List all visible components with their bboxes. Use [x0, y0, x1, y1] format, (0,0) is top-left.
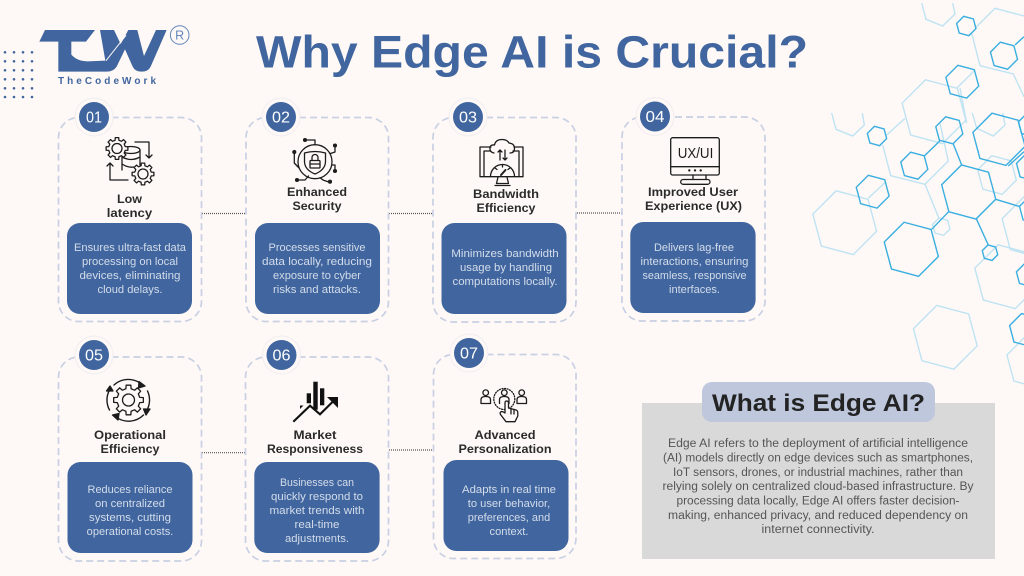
decorative hexagon network [813, 3, 1024, 388]
card 03: Bandwidth Efficiency: Minimizes bandwidth [451, 248, 559, 260]
icon: bars and rising arrow [293, 382, 338, 422]
card 07: Advanced Personalization: Advanced [474, 428, 536, 442]
panel: What is Edge AI [642, 382, 995, 559]
card 05: Operational Efficiency: systems, cutting [89, 512, 171, 524]
card 04: Improved User Experience: Improved User [648, 185, 738, 199]
card 05: Operational Efficiency [58, 336, 202, 561]
card 03: Bandwidth Efficiency: usage by handling [460, 262, 552, 274]
icon: UX/UI monitor: UX/UI [678, 145, 713, 162]
description text: making, enhanced privacy, and reduced dependency on [668, 510, 968, 522]
card 01: Low latency: Ensures ultra-fast data [74, 242, 187, 254]
card 06: Market Responsiveness: Responsiveness [267, 442, 363, 456]
connectors between cards [202, 213, 622, 453]
card 07: Advanced Personalization: context. [490, 526, 528, 538]
card 06: Market Responsiveness: adjustments. [285, 533, 349, 545]
card 07: Advanced Personalization [434, 334, 576, 558]
card 02: Enhanced Security: data locally, reducing [262, 256, 372, 268]
icon: cloud gauge monitor [480, 140, 523, 186]
card 07: Advanced Personalization: preferences, and [468, 512, 550, 524]
logo: TheCodeWork: TheCodeWork [58, 76, 156, 87]
card 05: Operational Efficiency: 05 [85, 348, 103, 365]
dot grid decoration [4, 51, 33, 98]
card 01: Low latency: Low [117, 192, 143, 206]
title: Why Edge AI is Crucial? [256, 26, 808, 78]
card 05: Operational Efficiency: Operational [94, 428, 166, 442]
card 06: Market Responsiveness: market trends with [270, 505, 364, 517]
card 07: Advanced Personalization: 07 [460, 346, 478, 363]
card 06: Market Responsiveness [246, 336, 388, 561]
card 01: Low latency [58, 98, 202, 322]
card 04: Improved User Experience: seamless, responsive [642, 270, 746, 282]
card 04: Improved User Experience: 04 [646, 109, 665, 126]
card 01: Low latency: devices, eliminating [80, 270, 180, 282]
card 07: Advanced Personalization: to user behavior, [468, 498, 550, 510]
card 06: Market Responsiveness: quickly respond to [271, 491, 363, 503]
card 05: Operational Efficiency: Reduces reliance [88, 484, 172, 496]
card 02: Enhanced Security: exposure to cyber [273, 270, 361, 282]
card 02: Enhanced Security: Processes sensitive [268, 242, 366, 254]
icon: shield lock circuit [293, 139, 336, 183]
card 01: Low latency: cloud delays. [98, 284, 162, 296]
card 04: Improved User Experience: interfaces. [669, 284, 720, 296]
card 04: Improved User Experience: Experience (UX) [645, 199, 742, 213]
card 03: Bandwidth Efficiency: computations locally. [452, 276, 558, 288]
heading pill [702, 382, 935, 422]
card 04: Improved User Experience: Delivers lag-free [654, 242, 734, 254]
logo: TheCodeWork: R [175, 28, 184, 42]
icon: people and pointing hand [481, 388, 526, 422]
card 06: Market Responsiveness: 06 [272, 348, 291, 365]
card 06: Market Responsiveness: Businesses can [280, 477, 354, 489]
logo: TheCodeWork [39, 26, 189, 87]
description text: processing data locally, Edge AI offers faster decision- [676, 496, 960, 508]
card 01: Low latency: 01 [86, 110, 102, 127]
description text [662, 438, 974, 536]
card 03: Bandwidth Efficiency: Efficiency [476, 201, 536, 215]
card 02: Enhanced Security [246, 98, 388, 322]
card 07: Advanced Personalization: Adapts in real time [462, 484, 556, 496]
card 05: Operational Efficiency: Efficiency [100, 442, 160, 456]
description text: internet connectivity. [762, 524, 874, 536]
card 05: Operational Efficiency: operational costs. [87, 526, 173, 538]
card 03: Bandwidth Efficiency: 03 [459, 110, 477, 127]
card 04: Improved User Experience: interactions, ensuring [640, 256, 748, 268]
card 07: Advanced Personalization: Personalization [458, 442, 552, 456]
card 01: Low latency: processing on local [82, 256, 178, 268]
card 02: Enhanced Security: Enhanced [287, 185, 347, 199]
description text: relying solely on centralized cloud-based infrastructure. By [662, 481, 974, 493]
description text: IoT sensors, drones, or industrial machines, rather than [673, 467, 963, 479]
card 02: Enhanced Security: Security [292, 199, 342, 213]
card 06: Market Responsiveness: real-time [294, 519, 340, 531]
card 03: Bandwidth Efficiency: Bandwidth [473, 187, 539, 201]
card 02: Enhanced Security: 02 [272, 110, 290, 127]
icon: gear with cycle arrows [106, 379, 150, 421]
card 06: Market Responsiveness: Market [294, 428, 336, 442]
card 05: Operational Efficiency: on centralized [95, 498, 165, 510]
icon: gears and database [106, 138, 154, 185]
card 03: Bandwidth Efficiency [433, 98, 576, 322]
heading pill: What is Edge AI? [712, 390, 925, 417]
card 02: Enhanced Security: risks and attacks. [273, 284, 361, 296]
card 01: Low latency: latency [107, 206, 153, 220]
icon: UX/UI monitor [671, 138, 719, 184]
description text: Edge AI refers to the deployment of artificial intelligence [668, 438, 968, 450]
description text: (AI) models directly on edge devices such as smartphones, [663, 452, 973, 464]
card 04: Improved User Experience [622, 98, 765, 321]
